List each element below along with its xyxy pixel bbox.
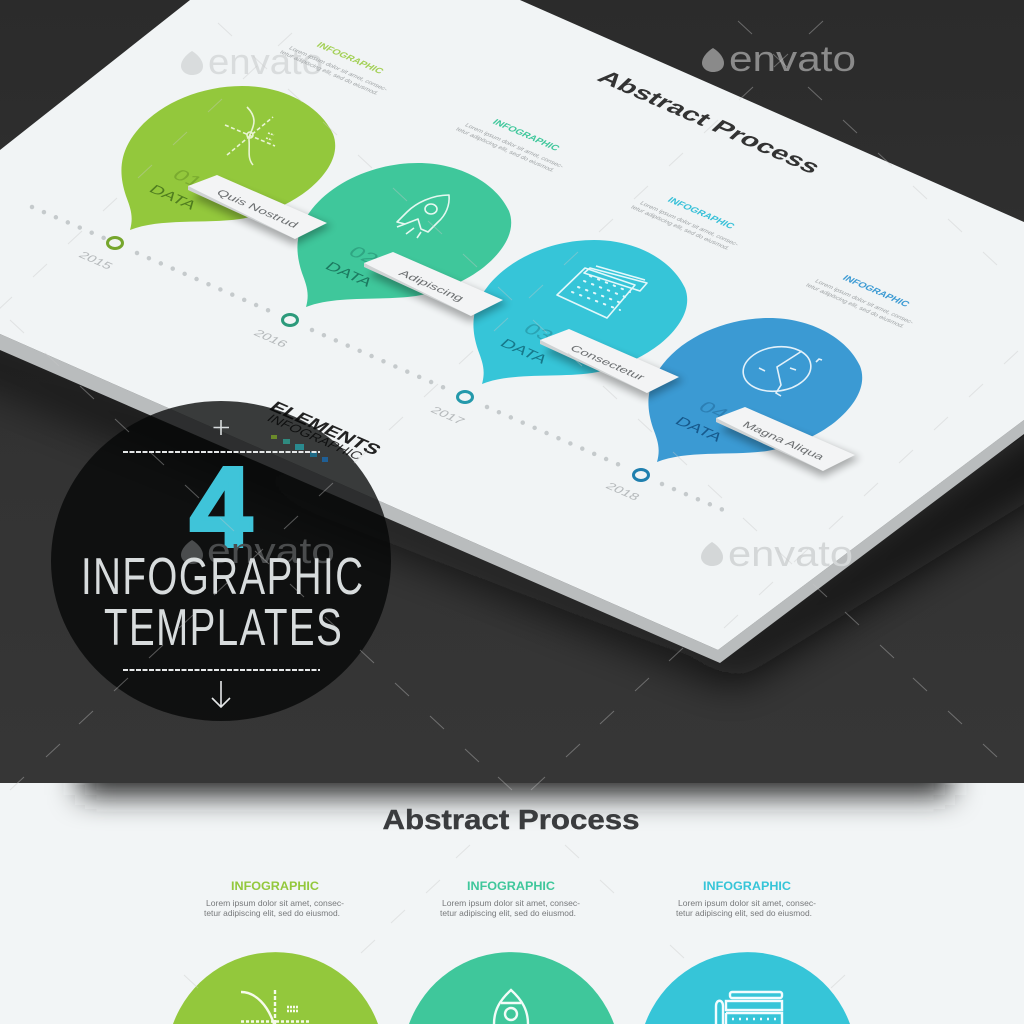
data label: DATA [146,182,201,212]
year 2015: 2015 [76,249,116,271]
step 4 [648,274,916,462]
timeline ring 2018 [634,470,648,480]
step 1 caption [278,41,390,96]
step 2 caption: INFOGRAPHIC [490,118,562,153]
step 4 caption: tetur adipiscing elit, sed do eiusmod. [804,282,906,329]
label: Quis Nostrud: Quis Nostrud [214,187,301,230]
watermark: envato on badge: envato [207,530,335,571]
year 2017: 2017 [428,404,468,426]
step 4 caption: Lorem ipsum dolor sit amet, consec- [813,278,916,326]
big number: 4 [190,444,252,570]
watermark: envato top right: envato [729,38,856,79]
data label: DATA [497,336,552,366]
bottom panel [0,783,1024,1024]
step number: 04 [694,398,733,423]
dotted timeline [32,207,728,512]
timeline ring 2017 [458,392,472,402]
column 2 caption: tetur adipiscing elit, sed do eiusmod. [440,908,576,918]
bottom title: Abstract Process [382,804,640,835]
icon: rocket flat [494,990,528,1024]
column 3 caption: Lorem ipsum dolor sit amet, consec- [678,898,816,908]
step 2 caption: Lorem ipsum dolor sit amet, consec- [463,122,566,170]
badge line 2: TEMPLATES [104,598,343,656]
data label: DATA [322,259,377,289]
step 3 caption: tetur adipiscing elit, sed do eiusmod. [629,204,731,251]
column 1 caption [204,879,344,918]
step number: 02 [344,243,383,268]
label: Adipiscing [364,252,508,322]
step 3 caption: Lorem ipsum dolor sit amet, consec- [638,200,741,248]
step 1 caption: Lorem ipsum dolor sit amet, consec- [287,45,390,93]
step 4 blob [648,318,862,462]
data label: DATA [672,414,727,444]
step 1 [121,41,390,230]
icon: clock [740,342,822,396]
label: Magna Aliqua: Magna Aliqua [740,419,828,462]
board side edge [0,334,1024,663]
watermark: envato top left: envato [208,41,323,82]
icon: plus [214,420,229,435]
badge line 1: INFOGRAPHIC [81,547,364,605]
watermark: envato lower right: envato [728,533,853,574]
step 1 blob [121,86,335,230]
iso title: Abstract Process [592,67,826,178]
step 3 caption: INFOGRAPHIC [665,196,737,231]
step 2 caption [454,118,566,173]
label: Consectetur: Consectetur [567,343,648,382]
column 1 circle [173,952,378,1024]
badge [51,401,391,721]
icon: calendar [557,266,647,318]
step 2 [297,118,566,307]
column 1 caption: INFOGRAPHIC [231,879,319,893]
year 2018: 2018 [603,480,643,502]
step 3 [473,196,741,384]
timeline ring 2015 [108,238,122,248]
label: Magna Aliqua [716,407,860,477]
column 2 caption: Lorem ipsum dolor sit amet, consec- [442,898,580,908]
dashed divider bottom [123,669,320,671]
elements legend: INFOGRAPHIC [264,412,366,462]
label: Quis Nostrud [188,175,332,245]
column 3 caption [676,879,816,918]
icon: graph curve [225,107,275,165]
year 2016: 2016 [251,327,291,349]
label: Consectetur [540,329,684,399]
column 3 caption: tetur adipiscing elit, sed do eiusmod. [676,908,812,918]
step 3 blob [473,240,687,384]
column 2 caption: INFOGRAPHIC [467,879,555,893]
step number: 01 [168,166,207,191]
column 2 caption [440,879,580,918]
icon: calendar flat [716,992,782,1024]
icon: down arrow [212,681,230,707]
dark background [0,0,1024,785]
column 3 circle [645,952,850,1024]
icon: graph curve flat [241,990,310,1024]
step 2 caption: tetur adipiscing elit, sed do eiusmod. [454,126,556,173]
column 2 circle [409,952,614,1024]
step number: 03 [519,320,558,345]
step 4 caption: INFOGRAPHIC [840,274,912,309]
step 3 caption [629,196,741,251]
legend colour squares [271,435,328,462]
board shadow [0,300,1024,682]
dashed divider top [123,451,320,453]
elements legend: ELEMENTS [265,399,385,458]
column 1 caption: tetur adipiscing elit, sed do eiusmod. [204,908,340,918]
icon: rocket [397,195,449,238]
column 1 caption: Lorem ipsum dolor sit amet, consec- [206,898,344,908]
label: Adipiscing: Adipiscing [396,268,467,303]
timeline ring 2016 [282,314,298,326]
step 1 caption: tetur adipiscing elit, sed do eiusmod. [278,49,380,96]
step 4 caption [804,274,916,329]
step 2 blob [297,163,511,307]
step 1 caption: INFOGRAPHIC [314,41,386,76]
column 3 caption: INFOGRAPHIC [703,879,791,893]
board surface [0,0,1024,650]
